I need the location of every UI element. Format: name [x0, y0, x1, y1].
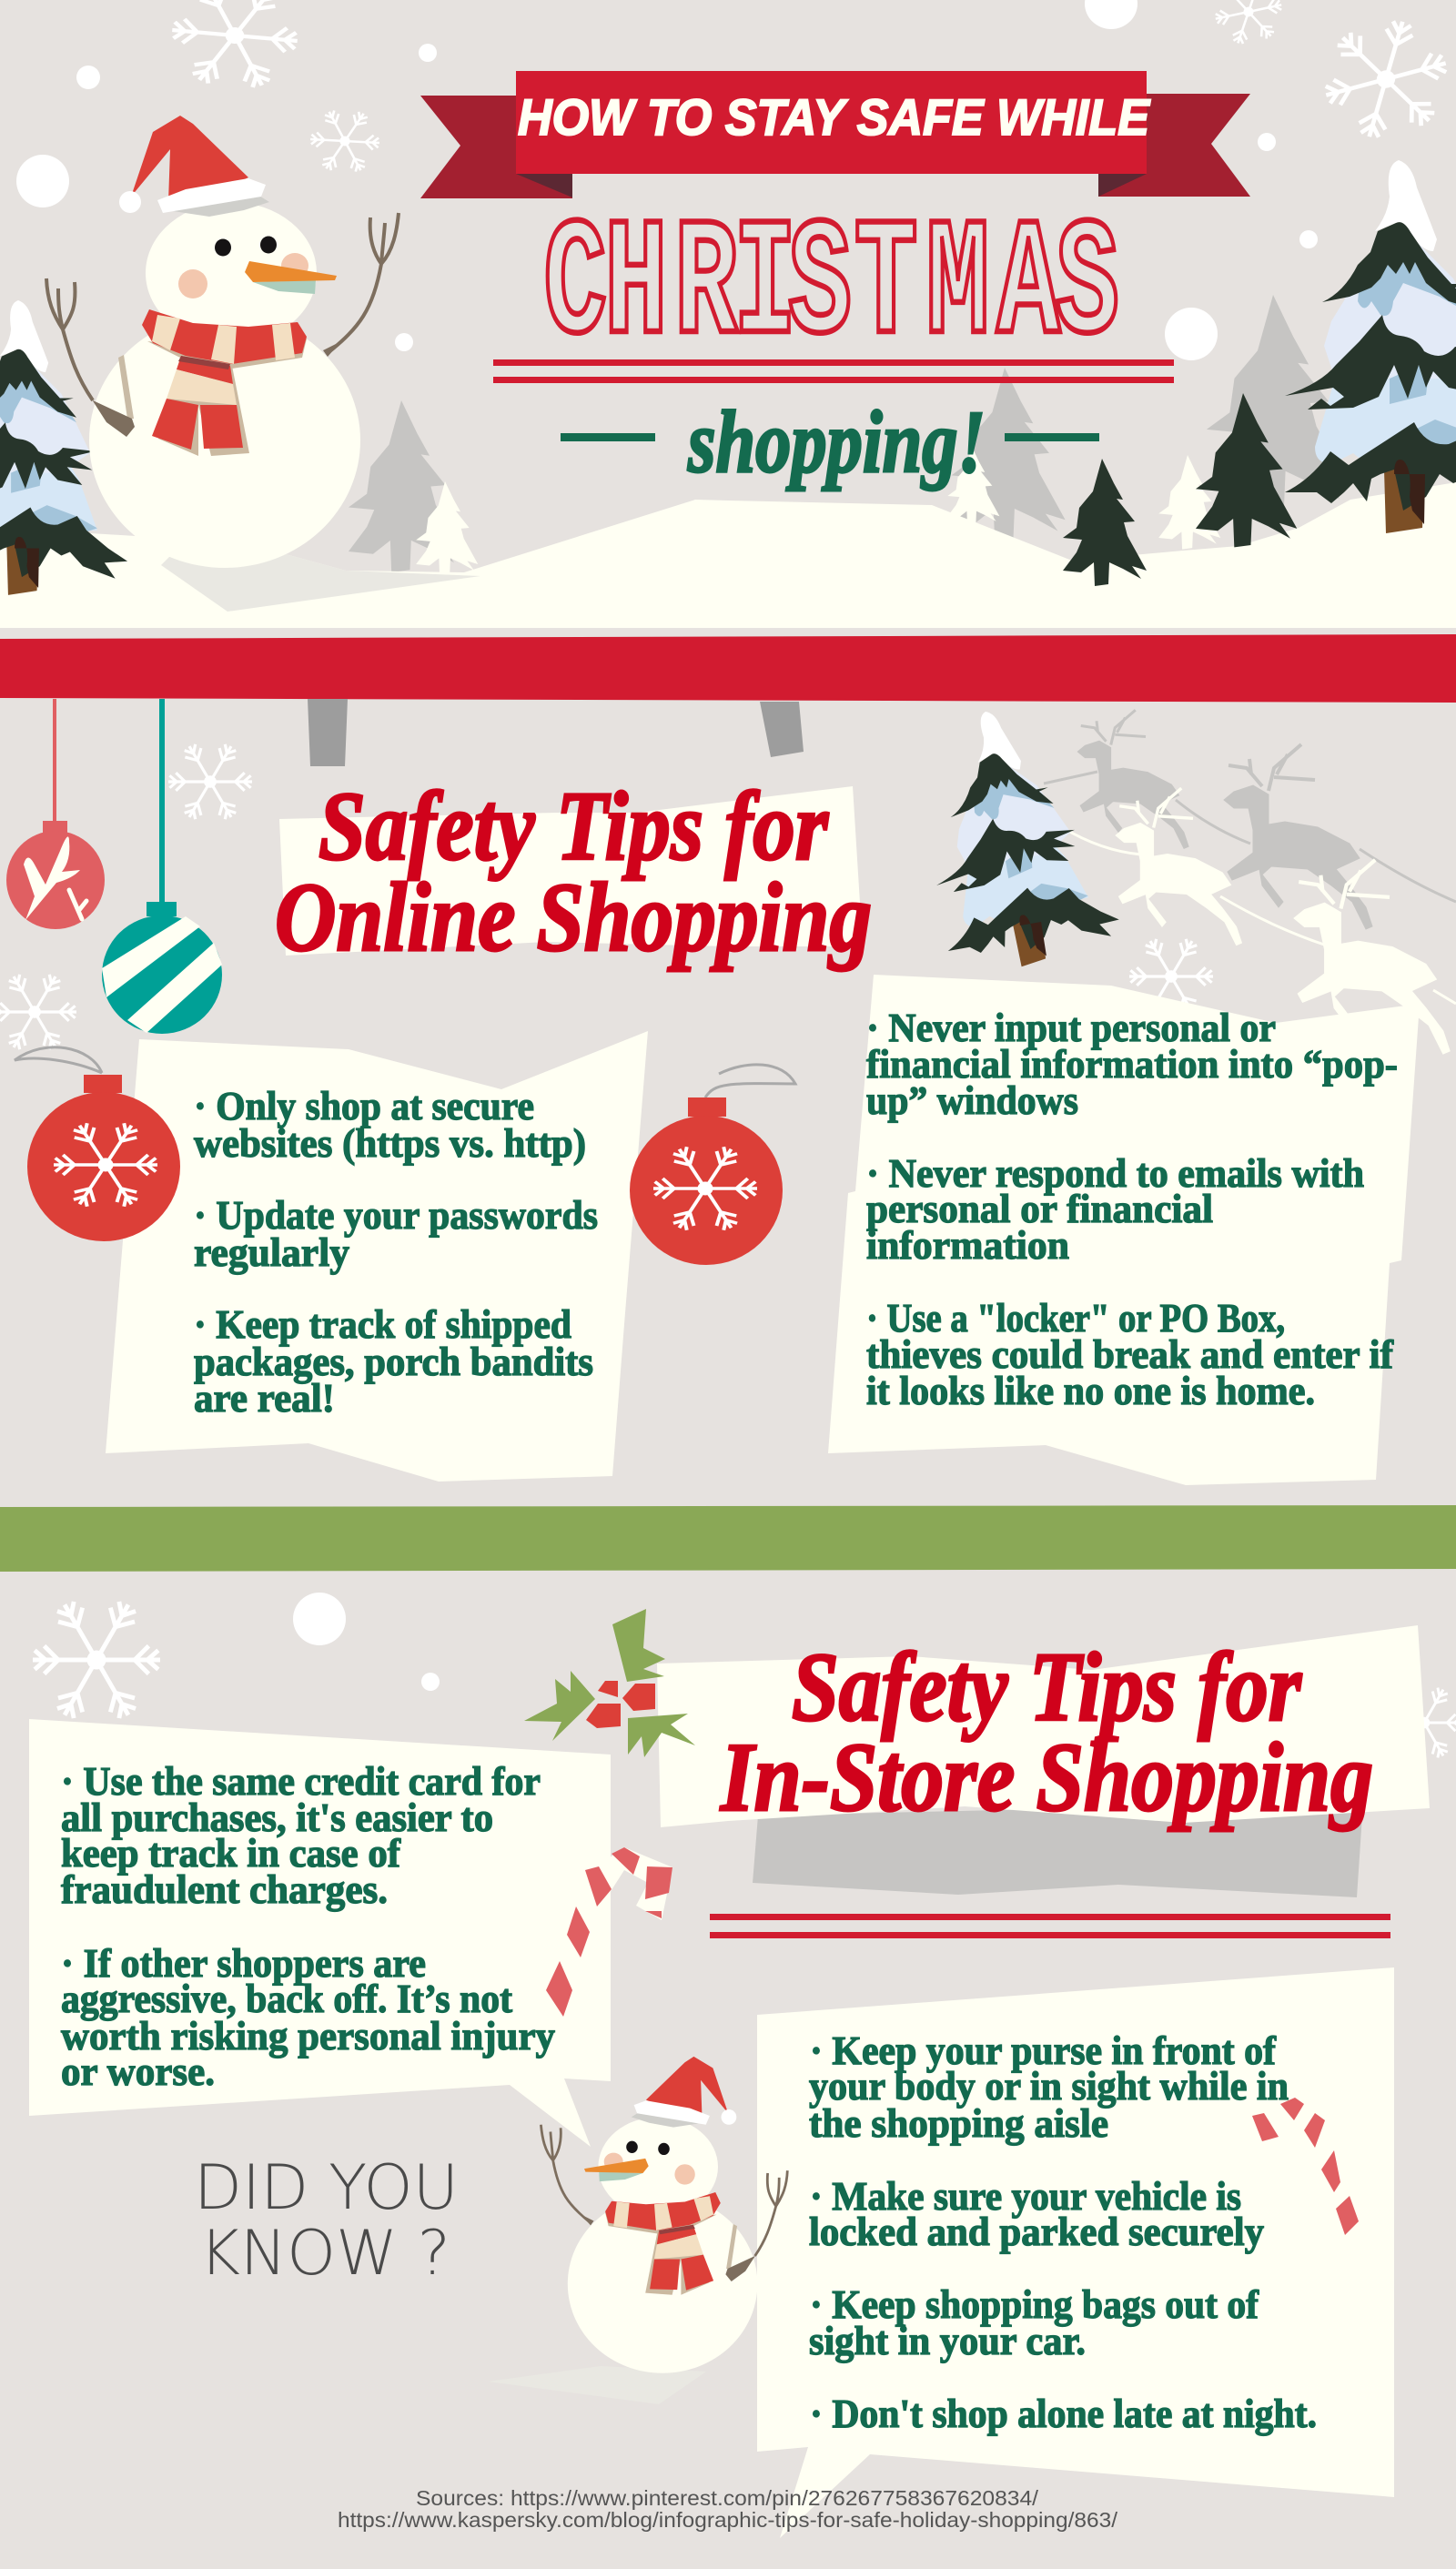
text: in-store tips left: fraudulent charges. [61, 1867, 388, 1912]
heading: in-store shopping: Safety Tips for [792, 1633, 1302, 1742]
snowflakes [167, 0, 1456, 175]
text: in-store tips left: · Use the same credit card for [61, 1759, 541, 1804]
reindeer team [1044, 710, 1456, 1054]
text: in-store tips left [61, 1759, 555, 2094]
candy cane left [539, 1847, 672, 2017]
text: in-store tips left: or worse. [61, 2049, 215, 2094]
text: in-store tips right: locked and parked securely [809, 2210, 1264, 2254]
text: online tips right: up” windows [866, 1078, 1078, 1123]
text: online tips right: information [866, 1223, 1069, 1268]
text: online tips right: thieves could break and enter if [866, 1332, 1394, 1377]
double rule [710, 1914, 1390, 1938]
text: online tips right: it looks like no one is home. [866, 1369, 1315, 1413]
text: in-store tips right: · Don't shop alone late at night. [810, 2392, 1317, 2436]
text: in-store tips left: worth risking personal injury [61, 2014, 555, 2058]
text: online tips left: · Keep track of shipped [194, 1302, 571, 1347]
did you know: DID YOU [194, 2152, 459, 2224]
text: in-store tips left: keep track in case of [61, 1831, 401, 1876]
red divider band [0, 634, 1456, 703]
ornament: teal [102, 699, 222, 1034]
small snowman [541, 2057, 787, 2373]
text: in-store tips right: the shopping aisle [809, 2101, 1108, 2146]
candy cane right [1252, 2098, 1365, 2241]
text: online tips right [866, 1006, 1398, 1413]
ornament: red right [630, 1065, 795, 1265]
snowy tree right [1285, 160, 1456, 533]
heading: in-store shopping: In-Store Shopping [719, 1724, 1373, 1832]
background trees [349, 295, 1349, 576]
section: header scene [0, 0, 1456, 628]
text: online tips right: · Never respond to emails with [866, 1151, 1364, 1196]
snowflakes [0, 742, 1213, 1052]
panel: in-store tips right [757, 1967, 1394, 2538]
snowman [46, 116, 399, 568]
text: in-store tips left: · If other shoppers are [61, 1941, 426, 1986]
text: online tips left: regularly [194, 1230, 349, 1275]
section: in-store shopping [29, 1593, 1456, 2538]
ground shadow [161, 554, 480, 612]
ornament: red left [15, 1047, 180, 1241]
title: CHRISTMAS: CHRISTMAS [543, 193, 1119, 382]
double rule under title [493, 359, 1174, 383]
title ribbon [420, 71, 1250, 198]
snowy ground [0, 482, 1456, 628]
snow dots [293, 1593, 440, 1691]
sources [338, 2486, 1118, 2532]
text: in-store tips left: aggressive, back off. It’s not [61, 1977, 512, 2021]
text: online tips right: personal or financial [866, 1187, 1213, 1231]
sources: Sources: https://www.pinterest.com/pin/276267758367620834/ [416, 2486, 1039, 2510]
ornament: pink [6, 699, 105, 929]
did you know [194, 2152, 459, 2290]
foreground dark trees [1063, 393, 1297, 586]
snow dots [16, 0, 1318, 360]
text: in-store tips left: all purchases, it's easier to [61, 1795, 493, 1840]
snowman shadow [488, 2366, 706, 2404]
panel: online tips left [106, 1031, 648, 1482]
text: online tips right: · Never input personal or [866, 1006, 1276, 1050]
heading: online shopping: Online Shopping [275, 864, 872, 972]
text: in-store tips right: · Keep your purse in front of [810, 2028, 1277, 2073]
text: online tips right: financial information into “pop- [866, 1042, 1398, 1087]
heading backing [657, 1625, 1430, 1827]
title: shopping: shopping! [687, 393, 986, 491]
snowy tree small [908, 695, 1124, 979]
heading: in-store shopping [719, 1633, 1373, 1832]
text: online tips right: · Use a "locker" or PO Box, [866, 1296, 1285, 1340]
section: online shopping [0, 695, 1456, 1485]
panel: in-store tips left [29, 1719, 611, 2147]
snowflakes [33, 1598, 1456, 1760]
title: shopping [561, 393, 1099, 491]
text: in-store tips right: sight in your car. [809, 2319, 1086, 2363]
heading shadow [753, 1802, 1363, 1897]
heading: online shopping [275, 773, 872, 972]
hanging grey tabs [308, 699, 804, 766]
did you know: KNOW ? [199, 2218, 450, 2290]
holly [524, 1609, 695, 1757]
text: in-store tips right: · Keep shopping bags out of [810, 2282, 1259, 2327]
snowy tree left [0, 300, 127, 595]
text: online tips left: are real! [194, 1376, 335, 1421]
heading backing [279, 786, 863, 956]
heading: online shopping: Safety Tips for [318, 773, 829, 881]
text: in-store tips right: your body or in sight while in [809, 2064, 1289, 2109]
text: online tips left: · Only shop at secure [194, 1084, 534, 1128]
green divider band [0, 1505, 1456, 1572]
text: online tips left: websites (https vs. http) [194, 1121, 586, 1166]
text: online tips left: packages, porch bandits [194, 1340, 593, 1384]
panel: online tips right [828, 975, 1420, 1485]
text: online tips left [194, 1084, 598, 1421]
text: in-store tips right: · Make sure your vehicle is [810, 2174, 1241, 2219]
sources: https://www.kaspersky.com/blog/infographic-tips-for-safe-holiday-shopping/863/ [338, 2508, 1118, 2532]
text: in-store tips right [809, 2028, 1317, 2436]
title line 1: HOW TO STAY SAFE WHILE [518, 88, 1151, 146]
text: online tips left: · Update your passwords [194, 1193, 598, 1238]
